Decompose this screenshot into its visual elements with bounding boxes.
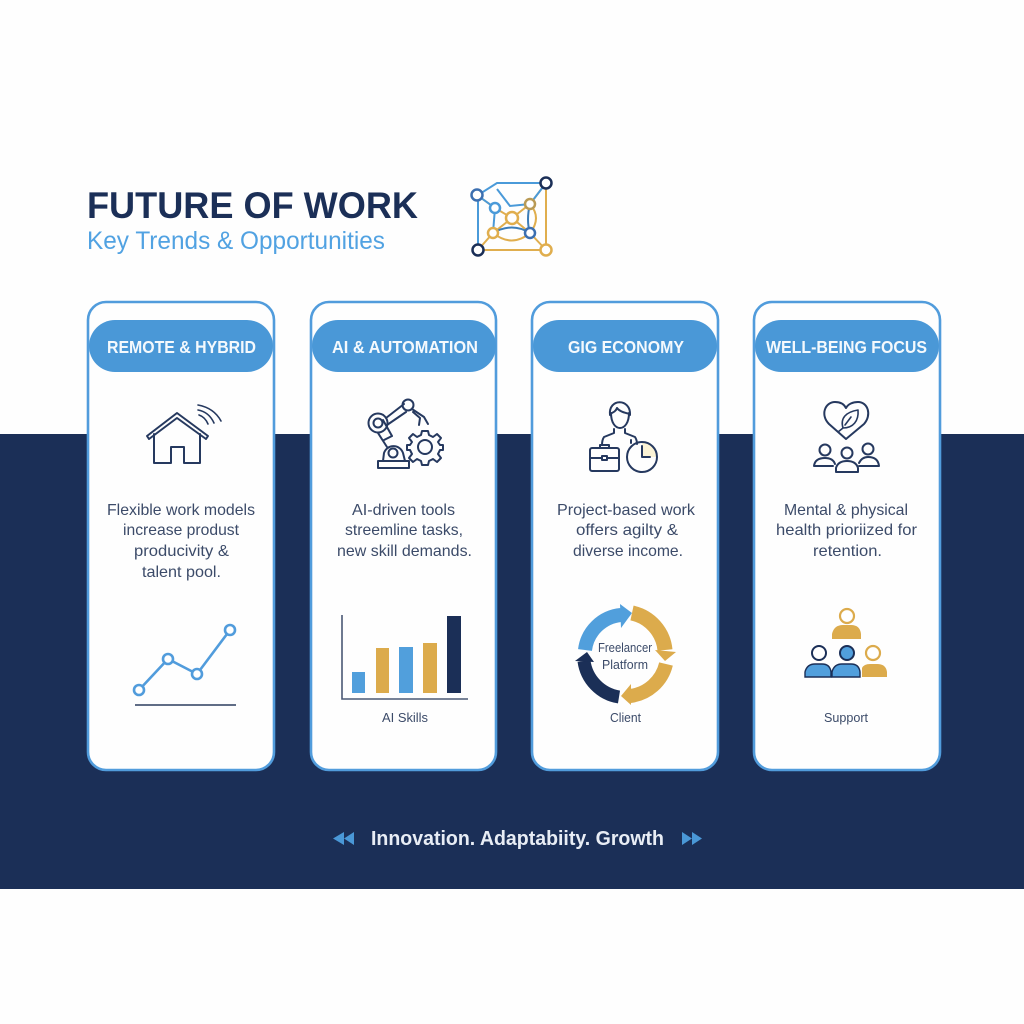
description: well-being focus: retention. [813, 543, 882, 560]
cycle center label [598, 640, 653, 672]
description: remote and hybrid: increase produst [123, 522, 240, 539]
description: remote and hybrid: producivity & [134, 543, 229, 560]
cycle caption: Client [610, 710, 641, 725]
description: AI and automation: AI-driven tools [352, 502, 455, 519]
subtitle: Key Trends & Opportunities [87, 227, 385, 255]
cycle center label: Freelancer [598, 640, 653, 655]
people diagram: support: Support [824, 710, 868, 725]
description: gig economy: offers agilty & [576, 522, 678, 539]
bar chart: AI skills [342, 615, 468, 725]
description: gig economy: diverse income. [573, 543, 683, 560]
description: remote and hybrid: talent pool. [142, 564, 221, 581]
description: AI and automation: streemline tasks, [345, 522, 463, 539]
panel: well-being focus [754, 302, 940, 770]
description: AI and automation: new skill demands. [337, 543, 472, 560]
arrow: navy segment [575, 652, 619, 697]
heading pill: gig economy: GIG ECONOMY [568, 337, 684, 357]
footer tagline [333, 828, 702, 850]
arrow: blue segment [585, 604, 632, 650]
heading pill: remote and hybrid [89, 320, 273, 372]
icon: left double arrow [333, 832, 354, 845]
panel: gig economy [532, 302, 718, 770]
icon: house with wifi [147, 405, 221, 463]
description: remote and hybrid [107, 502, 255, 581]
description: gig economy [557, 502, 696, 560]
description: well-being focus: health prioriized for [776, 522, 918, 539]
bar chart: AI skills: AI Skills [382, 710, 428, 725]
arrow: upper gold segment [632, 613, 676, 661]
panel: remote and hybrid [88, 302, 274, 770]
icon: robot arm and gear [368, 400, 443, 468]
description: well-being focus: Mental & physical [784, 502, 908, 519]
description: well-being focus [776, 502, 918, 560]
icon: worker with briefcase and clock [590, 402, 657, 472]
icon: heart with leaf and people [814, 402, 879, 472]
heading pill: well-being focus: WELL-BEING FOCUS [766, 337, 927, 357]
arrow: lower gold segment [621, 664, 666, 705]
icon: network cube [472, 178, 552, 256]
title: FUTURE OF WORK [87, 185, 418, 226]
heading pill: gig economy [533, 320, 717, 372]
dark navy background band [0, 434, 1024, 889]
heading pill: AI and automation [312, 320, 496, 372]
cycle diagram: freelancer platform [575, 604, 676, 725]
cycle center label: Platform [602, 657, 648, 672]
icon: right double arrow [682, 832, 702, 845]
people diagram: support [805, 609, 887, 725]
heading pill: well-being focus [755, 320, 939, 372]
heading pill: AI and automation: AI & AUTOMATION [332, 337, 478, 357]
description: remote and hybrid: Flexible work models [107, 502, 255, 519]
panel: AI and automation [311, 302, 496, 770]
description: gig economy: Project-based work [557, 502, 696, 519]
tagline text: Innovation. Adaptabiity. Growth [371, 828, 664, 850]
description: AI and automation [337, 502, 472, 560]
line chart [134, 625, 236, 705]
heading pill: remote and hybrid: REMOTE & HYBRID [107, 337, 256, 357]
